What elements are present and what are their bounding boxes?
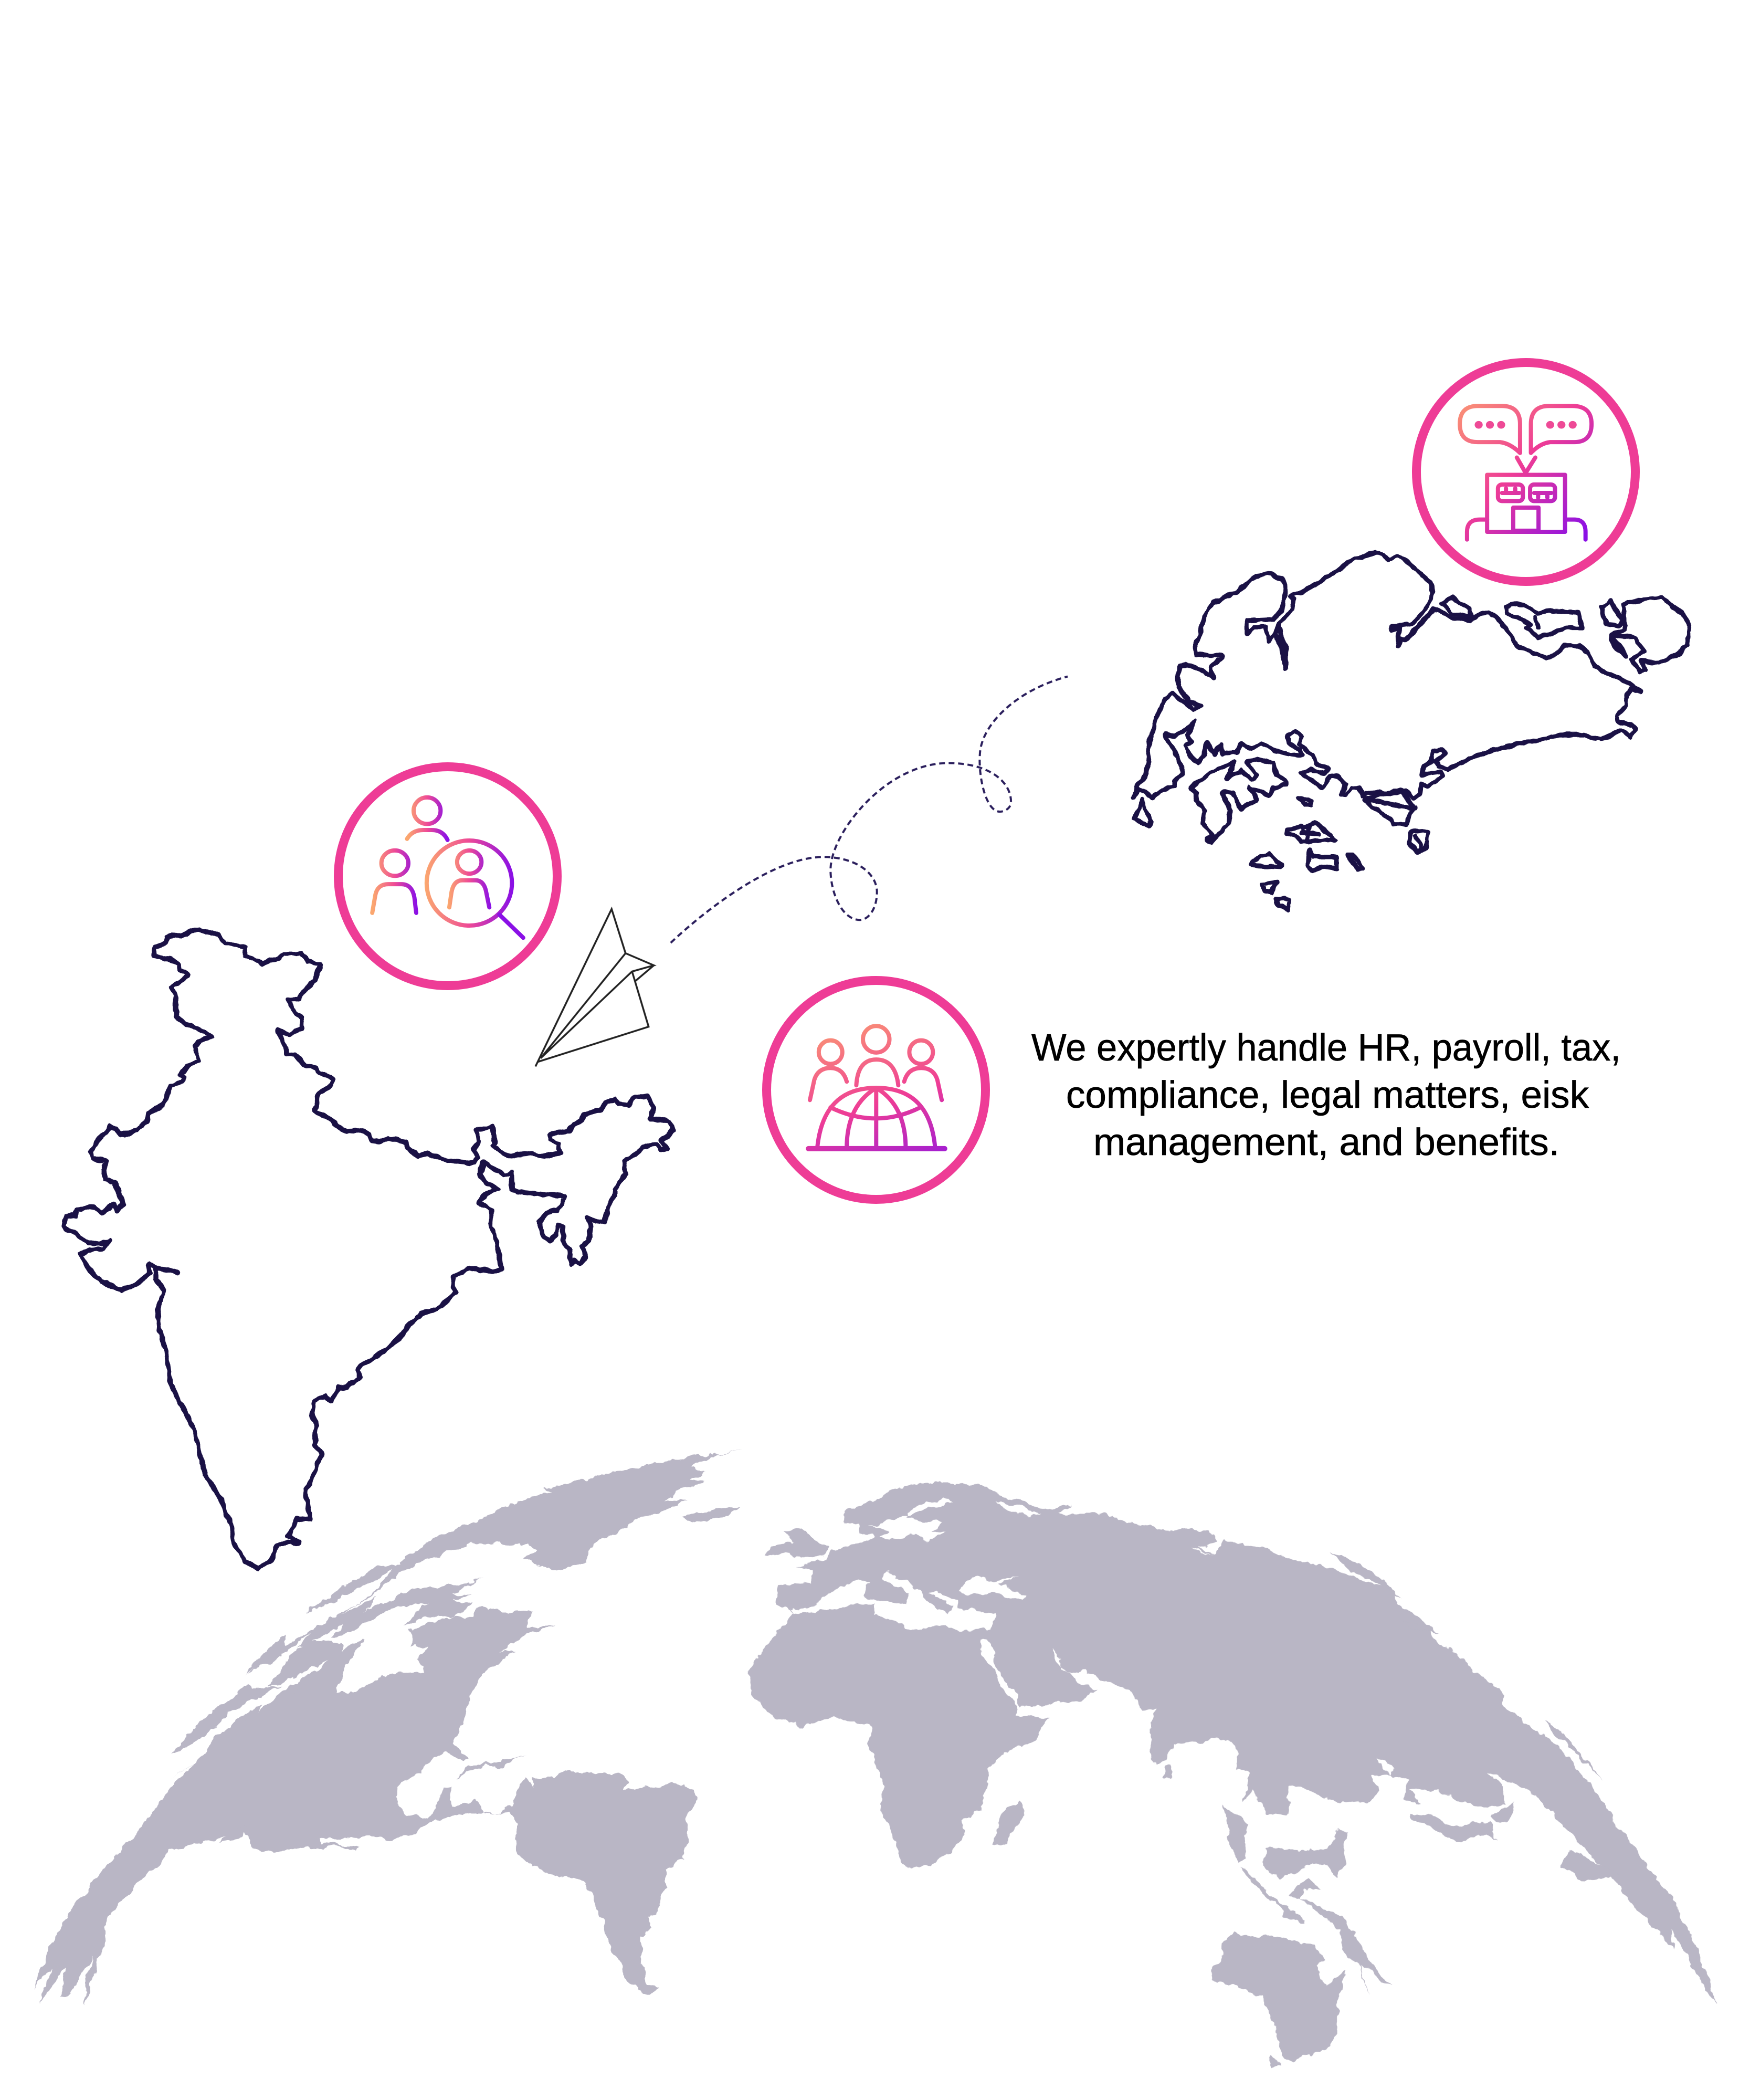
description text: management, and benefits. bbox=[1093, 1121, 1559, 1163]
description text bbox=[1031, 1027, 1621, 1163]
description text: We expertly handle HR, payroll, tax, bbox=[1031, 1027, 1621, 1069]
java and lesser islands bbox=[1411, 1813, 1495, 1842]
java bbox=[1240, 1866, 1304, 1923]
madagascar bbox=[994, 1801, 1025, 1846]
sumatra bbox=[1222, 1806, 1250, 1862]
north america mainland bbox=[34, 1607, 555, 2007]
singapore outline map bbox=[1134, 553, 1690, 909]
icon circle: recruiting search bbox=[338, 766, 557, 986]
americas and greenland bbox=[34, 1449, 744, 2007]
sulawesi bbox=[1289, 1879, 1321, 1898]
main island bbox=[1134, 553, 1641, 799]
greenland bbox=[407, 1449, 744, 1570]
australia bbox=[1211, 1932, 1347, 2062]
africa eurasia and oceania bbox=[748, 1483, 1716, 2069]
icon: people over globe bbox=[808, 1026, 945, 1149]
paper plane bbox=[535, 909, 654, 1066]
icon: speech bubbles over office building bbox=[1460, 406, 1591, 540]
caribbean islands bbox=[458, 1754, 526, 1778]
afro-eurasia landmass bbox=[748, 1483, 1716, 2003]
dashed flight path arrow bbox=[671, 677, 1068, 943]
pink ring bbox=[1416, 362, 1636, 582]
icon circle: global team bbox=[766, 981, 986, 1199]
india outline map bbox=[63, 929, 673, 1568]
tasmania bbox=[1269, 2055, 1282, 2069]
arctic islands bbox=[330, 1578, 485, 1640]
new guinea chain bbox=[1301, 1898, 1392, 1994]
pink ring bbox=[766, 981, 986, 1199]
south america bbox=[509, 1770, 697, 1993]
iceland bbox=[682, 1508, 740, 1523]
sri lanka bbox=[1164, 1766, 1172, 1778]
northeast islands bbox=[1442, 597, 1690, 673]
icon circle: company communication bbox=[1416, 362, 1636, 582]
britain and ireland bbox=[766, 1527, 829, 1559]
world map globe bbox=[34, 1449, 1716, 2069]
southern islands bbox=[1134, 759, 1428, 909]
icon: people under magnifying glass bbox=[372, 797, 523, 938]
northeast islands bbox=[1331, 1552, 1401, 1598]
description text: compliance, legal matters, eisk bbox=[1066, 1074, 1589, 1116]
pink ring bbox=[338, 766, 557, 986]
borneo bbox=[1262, 1829, 1347, 1879]
